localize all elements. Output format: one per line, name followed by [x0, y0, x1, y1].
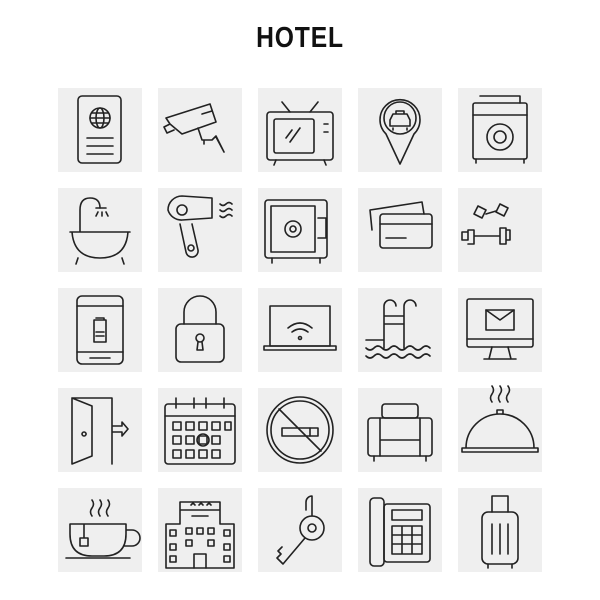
- icon: sofa: [368, 404, 432, 461]
- icon: padlock: [176, 296, 224, 362]
- tile backgrounds: [58, 88, 542, 572]
- icon: hotel building: [166, 502, 234, 568]
- icon: door exit: [72, 398, 128, 464]
- icon: tea cup: [66, 500, 140, 558]
- icon: no smoking: [267, 397, 333, 463]
- icon: bathtub shower: [70, 198, 130, 264]
- icon: taxi location pin: [380, 100, 420, 164]
- icon: phone battery: [77, 296, 123, 364]
- icon: monitor mail: [467, 299, 533, 359]
- icon: credit cards: [370, 202, 432, 248]
- icon: safe: [265, 200, 327, 263]
- title: HOTEL: [256, 22, 344, 54]
- icon: calendar: [165, 398, 235, 464]
- icon: tv: [267, 102, 333, 165]
- icon: luggage: [482, 496, 518, 568]
- icon: cloche: [462, 386, 538, 452]
- icon: hair dryer: [168, 196, 232, 257]
- icon: laptop wifi: [264, 306, 336, 350]
- icon: washing machine: [473, 96, 527, 163]
- icon: passport: [78, 96, 121, 163]
- icon: dumbbells: [462, 204, 510, 244]
- icon: cctv camera: [164, 104, 224, 152]
- icon: pool ladder: [366, 300, 430, 358]
- icon: telephone: [370, 498, 430, 566]
- icon: key: [277, 496, 324, 564]
